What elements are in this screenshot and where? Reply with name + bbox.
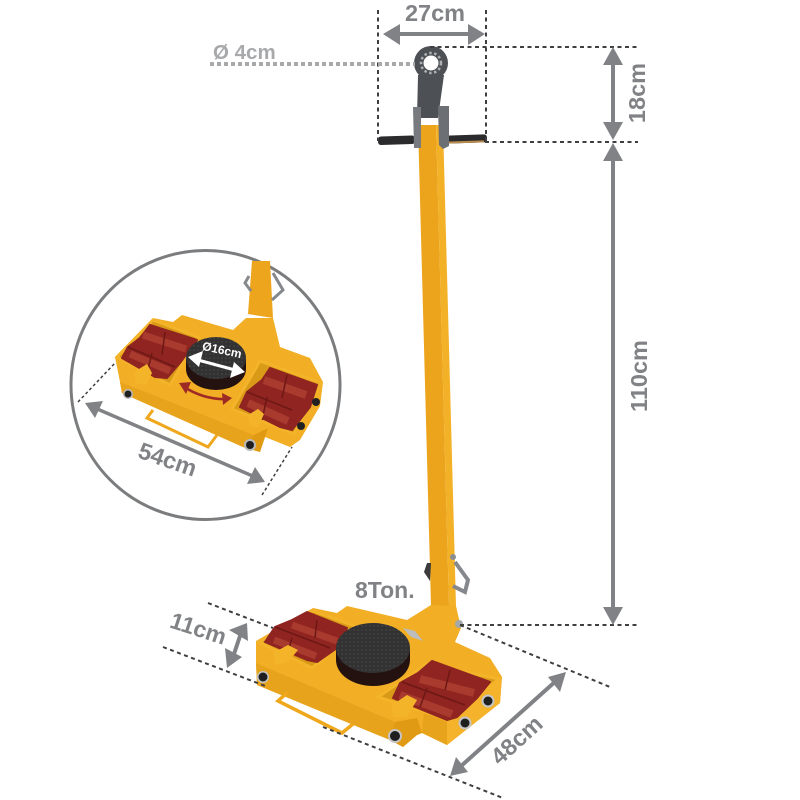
label plate (403, 628, 423, 641)
detail wheels (123, 389, 320, 451)
panel: circular detail view (71, 250, 340, 520)
arrow: 48cm (450, 672, 566, 776)
wheels (257, 671, 494, 743)
detail plate (115, 315, 323, 452)
detail front rail (120, 382, 254, 447)
right clip (392, 695, 417, 717)
detail right clip (248, 409, 264, 428)
detail rollers left (122, 325, 197, 385)
main skate base (256, 605, 502, 747)
left rollers (265, 612, 347, 665)
arrow: 27cm (383, 24, 485, 45)
detail carry handle (147, 410, 217, 447)
label: 54cm: 54cm (135, 437, 200, 482)
wrench ring head (414, 46, 448, 118)
label: diameter 4cm: Ø 4cm (213, 41, 276, 64)
label: 27cm: 27cm (405, 0, 465, 26)
handle brackets (413, 106, 449, 149)
arrow: rotation (179, 382, 232, 405)
plate (256, 605, 502, 747)
label: 8Ton: 8Ton. (355, 577, 415, 603)
label: 18cm: 18cm (624, 63, 650, 123)
arrow: 110cm (603, 143, 623, 625)
detail tray: right (232, 361, 321, 434)
bolt (455, 620, 463, 628)
label: 11cm: 11cm (167, 607, 230, 650)
detail left clip (134, 364, 152, 385)
arrow: 54cm (85, 401, 265, 484)
rubber disk (336, 623, 410, 686)
carry handle (278, 692, 353, 733)
tube (418, 125, 449, 606)
detail guide lines (78, 363, 292, 495)
detail rollers right (240, 368, 317, 430)
main pole with handle (378, 46, 487, 606)
detail rubber disk (186, 337, 246, 390)
detail tray: left (117, 320, 198, 385)
tray: right (378, 664, 499, 719)
front rail (256, 663, 395, 740)
dimension guide lines (163, 10, 638, 798)
cross bar (378, 134, 487, 145)
arrow: disk diameter (188, 351, 245, 378)
diameter 4cm guide (210, 62, 415, 66)
label: 16cm diameter: Ø16cm (201, 339, 243, 361)
arrow: 11cm (225, 623, 248, 668)
label: 48cm: 48cm (486, 710, 548, 770)
left clip (273, 645, 298, 665)
right rollers (392, 661, 490, 720)
label: 110cm: 110cm (626, 340, 652, 412)
side hooks (424, 554, 468, 592)
detail frame (71, 250, 340, 520)
tray: left (259, 611, 360, 668)
arrow: 18cm (603, 47, 623, 140)
detail pole (245, 261, 283, 318)
right side face (447, 677, 502, 745)
